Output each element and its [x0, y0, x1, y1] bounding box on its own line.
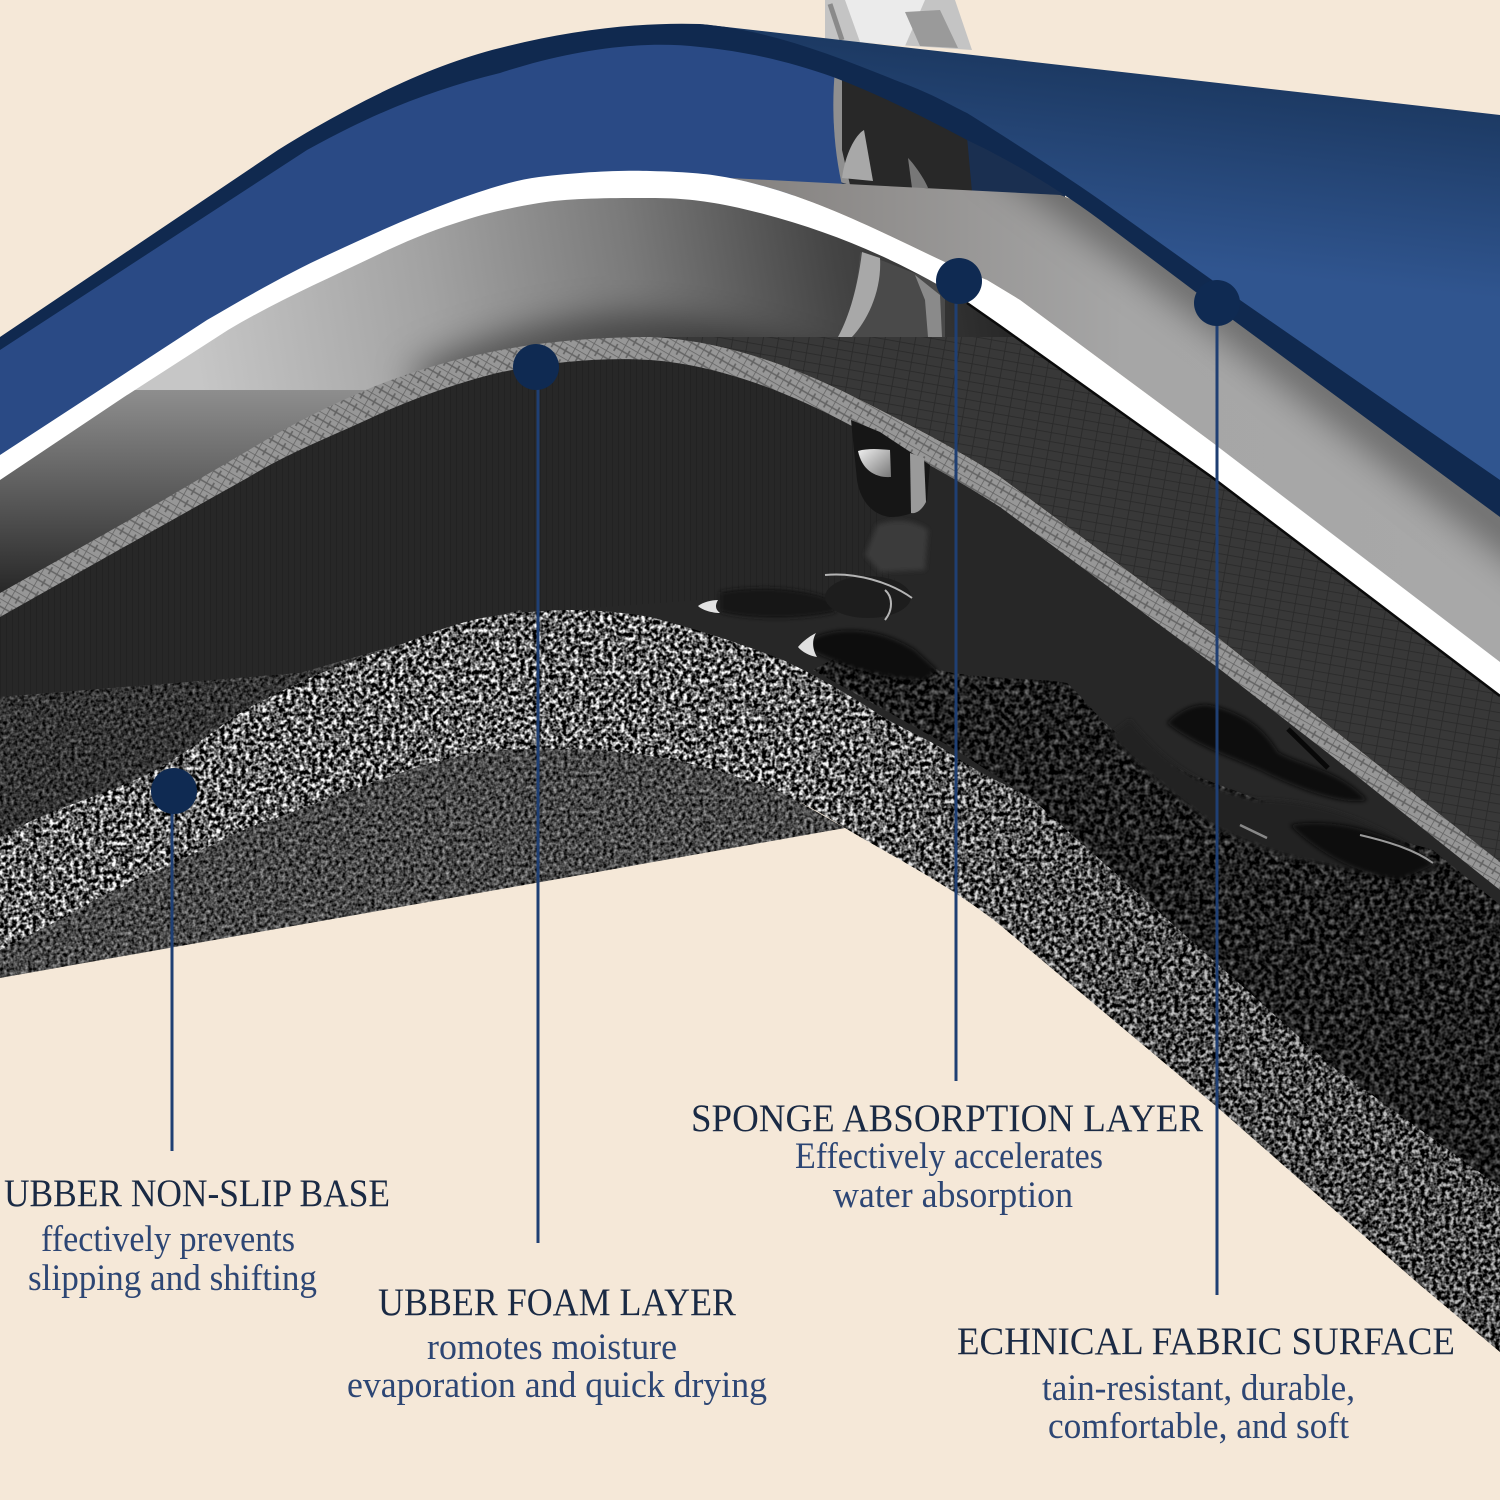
text block: foam layer [347, 1281, 767, 1406]
text block: sponge layer: SPONGE ABSORPTION LAYER [691, 1097, 1203, 1140]
shoe seen through mesh layer [851, 420, 930, 572]
panel: sponge underside [0, 185, 1060, 600]
marker: sponge layer [936, 258, 982, 304]
shoe seen behind sponge layer [838, 252, 945, 337]
text block: non-slip base: UBBER NON-SLIP BASE [4, 1172, 390, 1215]
text block: fabric surface [957, 1320, 1455, 1447]
panel: foam top surface [813, 660, 1500, 1187]
shoe seen behind fabric layer [833, 70, 1065, 200]
marker: fabric surface [1194, 280, 1240, 326]
callout line: fabric surface [1216, 303, 1218, 1295]
black edge under the white layer [967, 303, 1500, 696]
text block: sponge layer: Effectively accelerates [795, 1136, 1103, 1177]
text block: non-slip base [4, 1172, 390, 1299]
panel: mesh edge strip [0, 337, 1500, 890]
panel: non-slip base texture [0, 610, 845, 978]
text block: foam layer: UBBER FOAM LAYER [378, 1281, 736, 1324]
marker: foam layer [513, 344, 559, 390]
text block: sponge layer [691, 1097, 1203, 1216]
panel: blue fabric cross-section [0, 33, 846, 470]
text block: fabric surface: ECHNICAL FABRIC SURFACE [957, 1320, 1455, 1363]
water droplets [698, 574, 1440, 880]
text block: non-slip base: slipping and shifting [28, 1258, 317, 1299]
panel: mesh top surface [650, 337, 1500, 865]
text block: foam layer: romotes moisture [427, 1327, 677, 1368]
callout line: non-slip base [170, 790, 174, 1151]
text block: non-slip base: ffectively prevents [41, 1219, 295, 1260]
text block: sponge layer: water absorption [833, 1175, 1073, 1216]
panel: sponge top surface [731, 178, 1500, 662]
panel: blue fabric top surface [700, 24, 1500, 512]
text block: fabric surface: comfortable, and soft [1048, 1406, 1350, 1447]
text block: foam layer: evaporation and quick drying [347, 1365, 767, 1406]
panel: foam cross-section [0, 560, 1500, 1380]
panel: navy fabric edge [0, 24, 1500, 517]
fine ribs on the dark layer [0, 348, 900, 700]
panel: dark layer beneath the mesh [0, 348, 1500, 1250]
panel: white sponge edge [0, 171, 1500, 695]
shoe above the mat [825, 0, 972, 50]
text block: fabric surface: tain-resistant, durable, [1042, 1368, 1355, 1409]
marker: non-slip base [151, 768, 197, 814]
callout line: foam layer [536, 368, 540, 1243]
callout line: sponge layer [954, 282, 958, 1081]
